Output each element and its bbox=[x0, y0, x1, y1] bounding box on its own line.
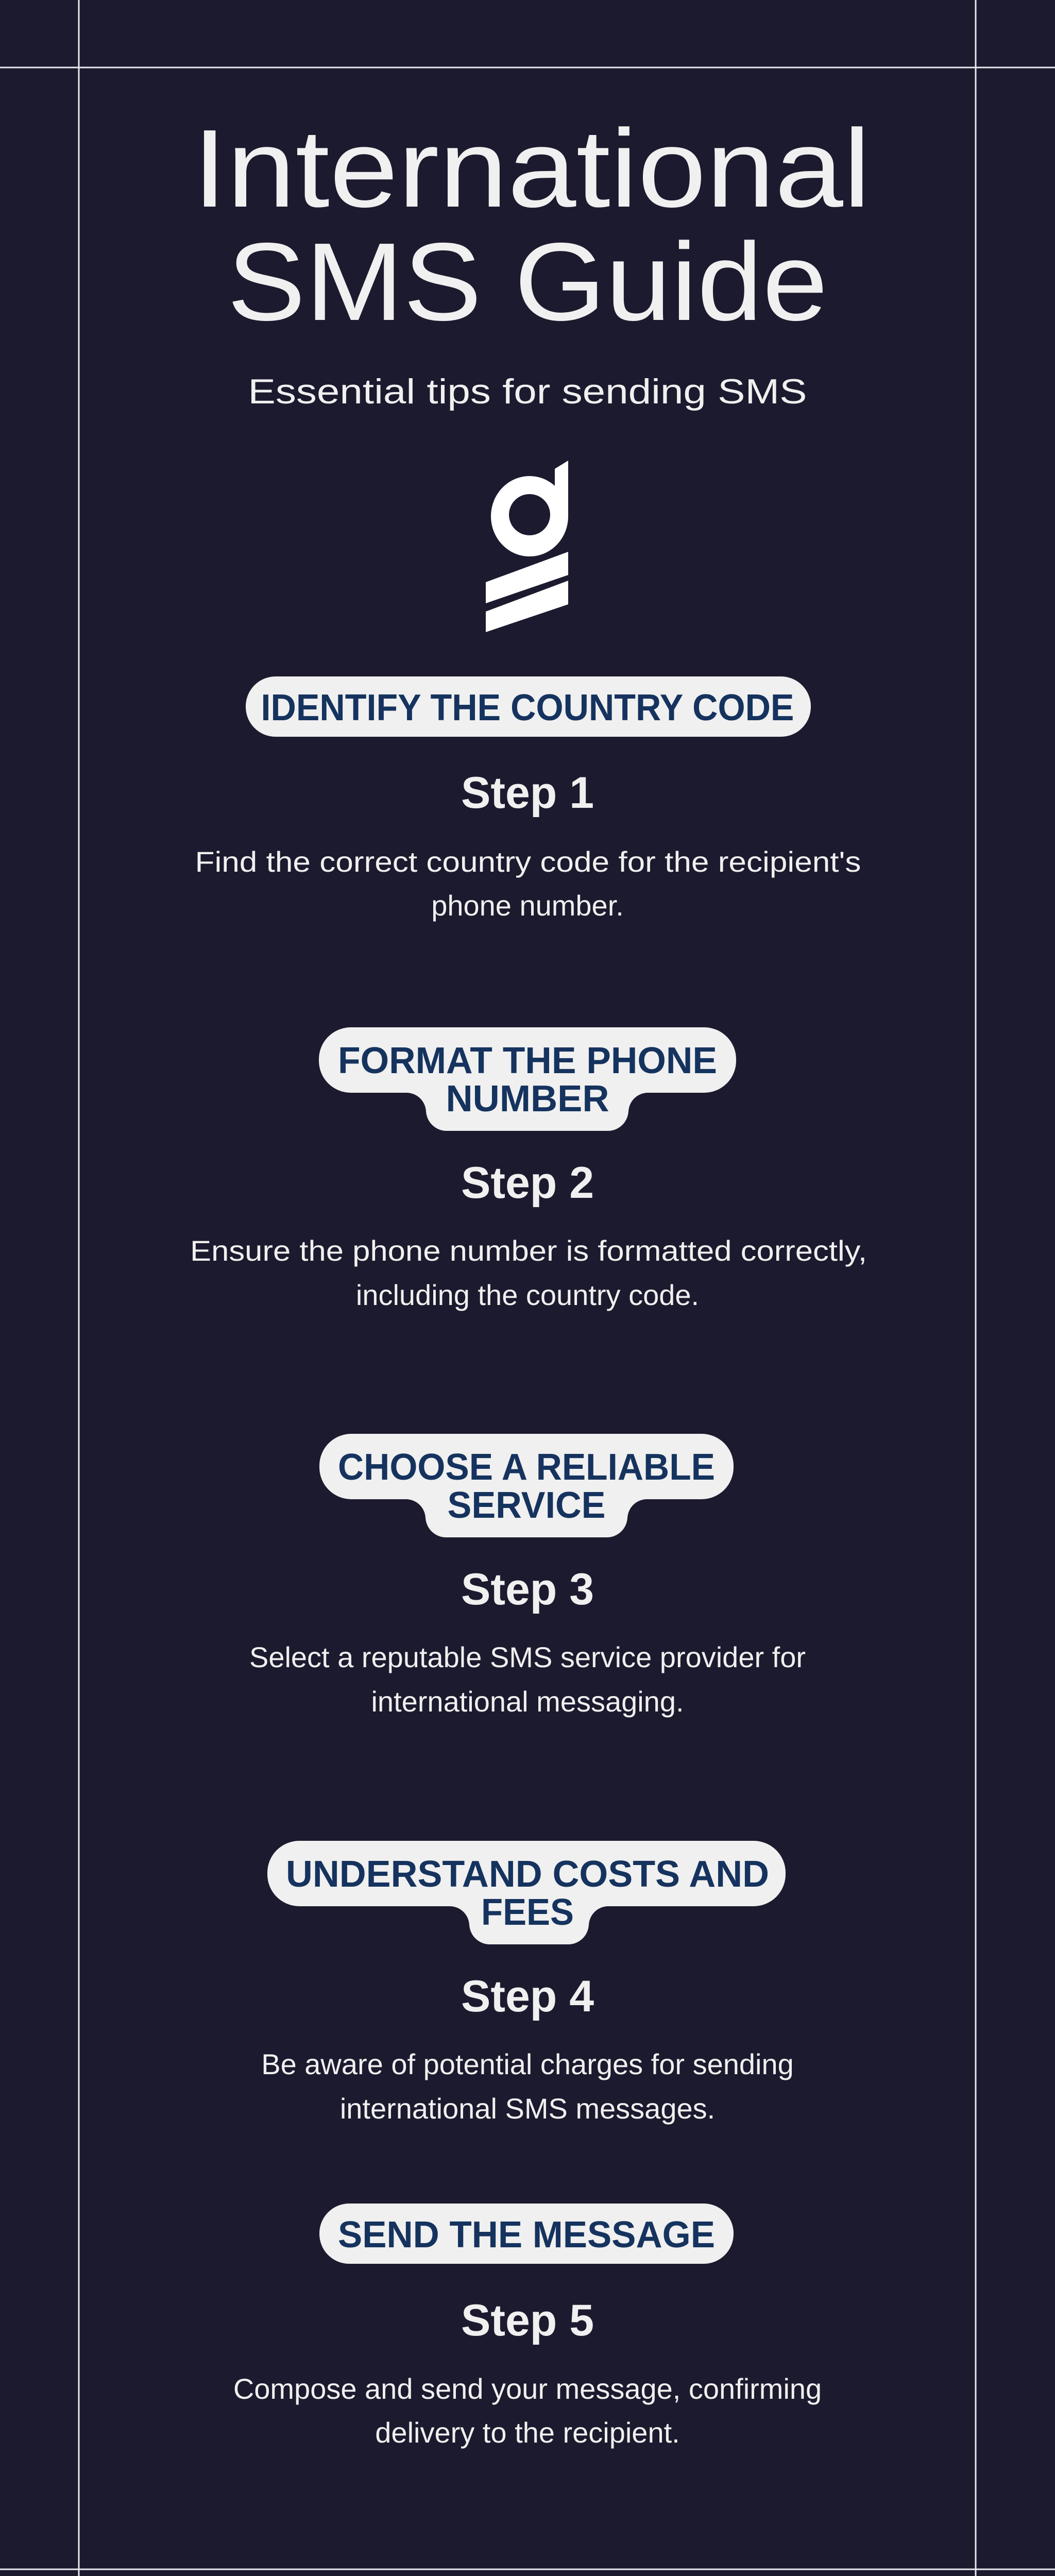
subtitle: Essential tips for sending SMS bbox=[248, 372, 807, 411]
pill: choose a reliable service: SERVICE bbox=[447, 1485, 606, 1526]
text block: step 1: Find the correct country code for the recipient's bbox=[195, 845, 861, 878]
title: International bbox=[193, 106, 871, 230]
text block: step 4: Be aware of potential charges for sending bbox=[261, 2048, 794, 2080]
pill: understand costs and fees: FEES bbox=[481, 1892, 574, 1933]
text block: step 1: phone number. bbox=[431, 889, 624, 922]
heading: step 4: Step 4 bbox=[461, 1972, 594, 2021]
step 5 bbox=[233, 2204, 822, 2449]
icon: logo bbox=[486, 461, 568, 632]
text block: step 3: international messaging. bbox=[371, 1685, 684, 1718]
text block: step 3: Select a reputable SMS service provider for bbox=[249, 1641, 806, 1673]
heading: step 1: Step 1 bbox=[461, 768, 594, 818]
text block: step 2 bbox=[190, 1234, 867, 1311]
pill: send the message bbox=[319, 2204, 734, 2264]
pill: identify the country code: IDENTIFY THE COUNTRY CODE bbox=[261, 687, 794, 728]
title bbox=[193, 106, 871, 344]
pill: format the phone number bbox=[319, 1027, 736, 1131]
text block: step 2: including the country code. bbox=[356, 1279, 699, 1311]
pill: understand costs and fees: UNDERSTAND COSTS AND bbox=[286, 1854, 769, 1895]
text block: step 4 bbox=[261, 2048, 794, 2125]
text block: step 3 bbox=[249, 1641, 806, 1718]
step 4 bbox=[261, 1841, 794, 2125]
text block: step 2: Ensure the phone number is formatted correctly, bbox=[190, 1234, 867, 1267]
step 2 bbox=[190, 1027, 867, 1311]
pill: choose a reliable service: CHOOSE A RELIABLE bbox=[338, 1447, 715, 1488]
pill: format the phone number: FORMAT THE PHONE bbox=[338, 1040, 717, 1081]
heading: step 5: Step 5 bbox=[461, 2296, 594, 2345]
step 1 bbox=[195, 676, 861, 922]
text block: step 5: delivery to the recipient. bbox=[375, 2416, 680, 2449]
step 3 bbox=[249, 1434, 806, 1718]
pill: choose a reliable service bbox=[319, 1434, 734, 1537]
text block: step 5: Compose and send your message, confirming bbox=[233, 2372, 822, 2405]
title: SMS Guide bbox=[227, 219, 828, 344]
text block: step 5 bbox=[233, 2372, 822, 2449]
pill: identify the country code bbox=[246, 676, 811, 737]
pill: send the message: SEND THE MESSAGE bbox=[338, 2214, 715, 2256]
heading: step 3: Step 3 bbox=[461, 1565, 594, 1614]
pill: format the phone number: NUMBER bbox=[446, 1078, 609, 1120]
text block: step 1 bbox=[195, 845, 861, 922]
pill: understand costs and fees bbox=[267, 1841, 786, 1944]
heading: step 2: Step 2 bbox=[461, 1158, 594, 1208]
text block: step 4: international SMS messages. bbox=[340, 2092, 715, 2125]
